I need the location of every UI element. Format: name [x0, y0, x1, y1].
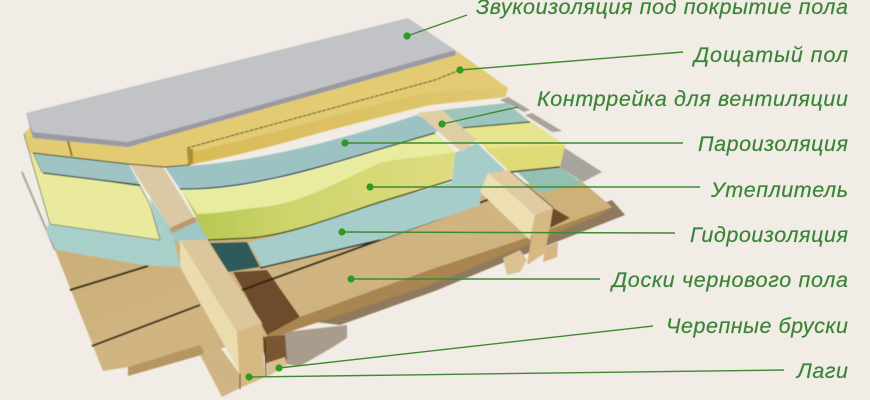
leader: waterproofing [338, 228, 675, 236]
label: vapor barrier: Пароизоляция [698, 132, 848, 156]
leader: counter-rail [438, 107, 518, 128]
label: counter-rail: Контррейка для вентиляции [537, 87, 848, 111]
label: subfloor boards: Доски чернового пола [610, 268, 848, 292]
finished plank floor [24, 50, 508, 167]
counter-rails [130, 110, 477, 233]
floor assembly illustration [22, 18, 625, 397]
hydro-insulation layer [45, 143, 583, 272]
left insulation [24, 134, 160, 240]
labels [476, 0, 848, 383]
label: insulation: Утеплитель [710, 178, 848, 202]
sound insulation sheet [26, 18, 456, 147]
leader: vapor barrier [341, 139, 683, 147]
vapor barrier layer [33, 103, 530, 189]
main insulation [182, 133, 455, 240]
leader: plank floor [456, 52, 683, 74]
grey side strips [500, 97, 602, 182]
label: cranial bars: Черепные бруски [666, 314, 848, 338]
rear joist [480, 170, 558, 275]
label: plank floor: Дощатый пол [692, 43, 848, 67]
side rail strip [22, 172, 55, 250]
cast shadow [270, 200, 625, 366]
rough floor boards [55, 180, 612, 376]
leader: joists [245, 370, 784, 381]
right insulation [462, 122, 565, 172]
leader: insulation [366, 183, 700, 191]
label: joists: Лаги [795, 359, 848, 383]
label: waterproofing: Гидроизоляция [690, 223, 848, 247]
front joist [180, 240, 287, 397]
leader lines and dots [245, 15, 784, 381]
leader: cranial bars [275, 326, 653, 372]
leader: sound insulation [403, 15, 467, 40]
leader: subfloor boards [347, 275, 600, 283]
